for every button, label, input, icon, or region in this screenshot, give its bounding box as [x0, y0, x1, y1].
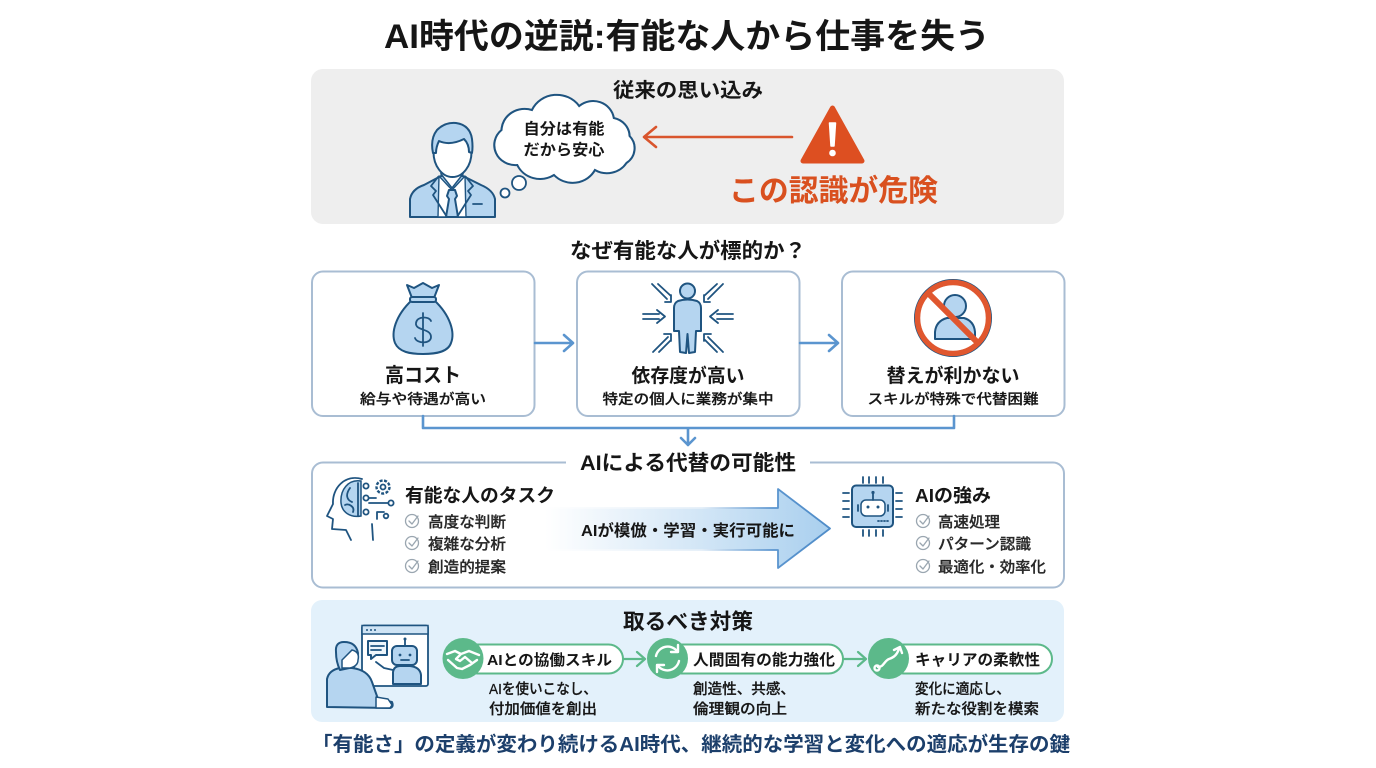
- pill description: 倫理観の向上: [693, 701, 787, 718]
- pill: career flexibility: [868, 638, 1052, 679]
- thought bubble: 自分は有能: [524, 119, 605, 138]
- card description: 特定の個人に業務が集中: [602, 391, 774, 407]
- heading: conventional belief: 従来の思い込み: [613, 79, 763, 102]
- pill title: 人間固有の能力強化: [693, 650, 835, 669]
- icon: head with brain and gear: [327, 478, 394, 540]
- icon: prohibited person: [917, 282, 989, 354]
- pill description: 変化に適応し、: [915, 680, 1010, 698]
- thought bubble: [494, 95, 635, 198]
- checklist: AI strengths: 最適化・効率化: [938, 558, 1046, 576]
- warning text: この認識が危険: [729, 174, 938, 208]
- pill description: [915, 680, 1039, 718]
- arrow: step 1 to 2: [623, 652, 645, 666]
- card title: 替えが利かない: [886, 364, 1020, 387]
- pill description: [693, 680, 795, 718]
- icon: person under converging arrows: [643, 284, 733, 353]
- heading: AI replacement: AIによる代替の可能性: [580, 452, 796, 475]
- card description: 給与や待遇が高い: [360, 391, 486, 407]
- connector: cards to AI section: [423, 416, 954, 445]
- pill title: キャリアの柔軟性: [915, 650, 1040, 669]
- pill description: [489, 681, 597, 718]
- title: AI時代の逆説:有能な人から仕事を失う: [384, 18, 990, 56]
- big arrow: AI can imitate: [545, 489, 830, 568]
- pill: human capability: [647, 638, 843, 679]
- icon: winding path arrow: [874, 647, 902, 670]
- pill description: 創造性、共感、: [693, 680, 795, 698]
- checklist: tasks: 高度な判断: [428, 514, 506, 531]
- checklist: tasks: 複雑な分析: [428, 536, 506, 553]
- icon: AI chip robot: [843, 477, 902, 536]
- heading: countermeasures: 取るべき対策: [623, 610, 753, 634]
- icon: warning triangle: [803, 108, 862, 161]
- arrow: cost to dependency: [535, 335, 573, 351]
- panel: countermeasures: [311, 600, 1064, 722]
- icon: refresh arrows: [656, 645, 679, 672]
- card description: スキルが特殊で代替困難: [868, 391, 1038, 407]
- thought bubble: だから安心: [524, 140, 605, 159]
- checklist: AI strengths: 高速処理: [938, 514, 1000, 531]
- icon: businessman: [410, 123, 495, 217]
- card: irreplaceable: [842, 272, 1064, 416]
- panel: conventional belief: [311, 69, 1064, 224]
- card title: 高コスト: [385, 364, 461, 387]
- pill title: AIとの協働スキル: [487, 651, 612, 669]
- card: high dependency: [577, 272, 800, 416]
- icon: money bag: [394, 283, 452, 354]
- icon: handshake: [447, 651, 479, 669]
- pill: AI collaboration: [442, 638, 623, 679]
- list heading: tasks: 有能な人のタスク: [405, 485, 555, 506]
- panel: AI replacement: [312, 452, 1064, 588]
- card title: 依存度が高い: [632, 364, 744, 387]
- footer message: 「有能さ」の定義が変わり続けるAI時代、継続的な学習と変化への適応が生存の鍵: [312, 732, 1070, 756]
- arrow: warning to belief: [644, 127, 792, 147]
- heading: why capable people: なぜ有能な人が標的か？: [570, 239, 806, 263]
- card: high cost: [312, 272, 534, 416]
- checklist: AI strengths: パターン認識: [938, 536, 1031, 553]
- checklist: tasks: [406, 514, 506, 576]
- arrow: dependency to irreplaceable: [800, 335, 838, 351]
- checklist: AI strengths: [916, 514, 1046, 576]
- pill description: 付加価値を創出: [489, 701, 597, 718]
- pill description: 新たな役割を模索: [915, 700, 1039, 718]
- arrow: step 2 to 3: [844, 652, 866, 666]
- list heading: AI strengths: AIの強み: [915, 485, 991, 506]
- pill description: AIを使いこなし、: [489, 681, 597, 698]
- icon: person working with AI robot on screen: [327, 626, 428, 708]
- big arrow: AI can imitate: AIが模倣・学習・実行可能に: [581, 521, 795, 540]
- checklist: tasks: 創造的提案: [428, 559, 506, 576]
